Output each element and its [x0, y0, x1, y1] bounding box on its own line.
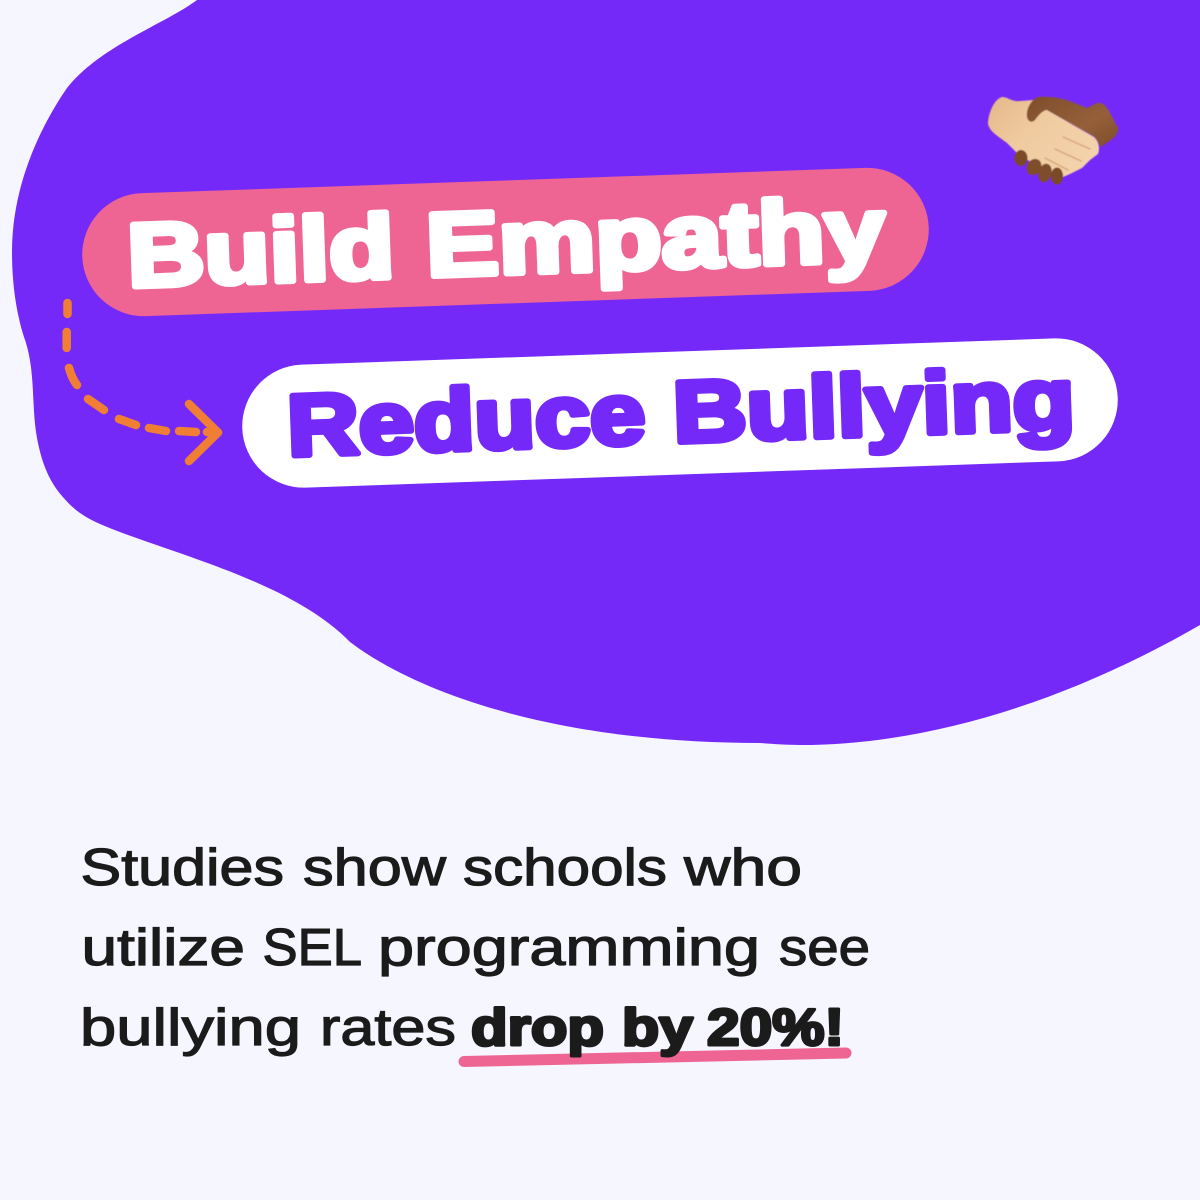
bold emphasis text: drop: [471, 999, 604, 1057]
bold emphasis text: [471, 999, 844, 1057]
text line 3: [80, 999, 456, 1057]
pill: Reduce Bullying: [240, 336, 1120, 490]
purple blob: [12, 0, 1200, 745]
text line 3: bullying: [80, 999, 301, 1057]
heading: Build Empathy: [126, 180, 887, 307]
bold emphasis text: 20%!: [707, 999, 844, 1057]
text line 2: SEL: [262, 919, 362, 977]
underline highlight: [464, 1053, 846, 1062]
text line 2: see: [779, 919, 870, 977]
text line 3: rates: [320, 999, 456, 1057]
text line 1: [80, 839, 802, 897]
text line 1: Studies: [80, 839, 284, 897]
heading: Reduce Bullying: Bullying: [671, 350, 1076, 461]
text line 2: utilize: [82, 919, 245, 977]
text line 2: programming: [378, 919, 760, 977]
bold emphasis text: by: [622, 999, 693, 1057]
icon: handshake: [988, 97, 1118, 184]
pill: Build Empathy: [80, 166, 931, 318]
heading: Build Empathy: Empathy: [424, 180, 887, 296]
text line 1: show: [303, 839, 447, 897]
heading: Build Empathy: Build: [126, 197, 396, 307]
heading: Reduce Bullying: [286, 350, 1076, 475]
body text: [80, 839, 870, 1062]
arrow: dashed orange: [67, 303, 218, 461]
text line 1: who: [683, 839, 802, 897]
text line 2: [82, 919, 870, 977]
text line 1: schools: [463, 839, 667, 897]
heading: Reduce Bullying: Reduce: [286, 365, 647, 475]
